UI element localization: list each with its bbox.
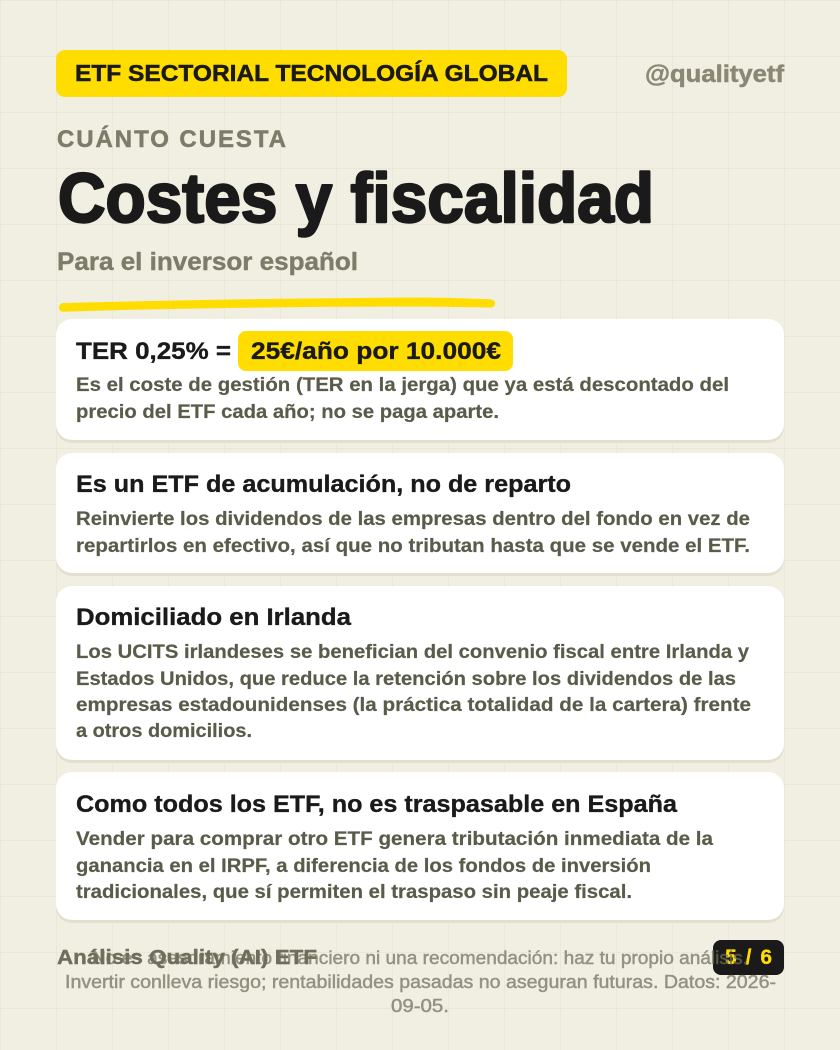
text: TER body: Es el coste de gestión (TER en la jerga) que ya está descontado del [76,374,729,396]
text: traspaso body: tradicionales, que sí permiten el traspaso sin peaje fiscal. [76,881,632,903]
panel: TER [56,319,784,443]
highlight pill [238,331,513,371]
panel: acumulación [56,453,784,576]
text: traspaso body: Vender para comprar otro ETF genera tributación inmediata de la [76,828,713,850]
text: acumulación body: Reinvierte los dividendos de las empresas dentro del fondo en vez de [76,508,750,530]
disclaimer: 09-05. [391,996,449,1016]
handle: @qualityetf [645,61,785,88]
text: Irlanda body [76,641,751,742]
eyebrow: CUÁNTO CUESTA [57,125,286,153]
page badge [713,940,784,975]
subtitle: Para el inversor español [57,248,358,276]
text: traspaso body [76,828,713,903]
text: Irlanda body: Los UCITS irlandeses se benefician del convenio fiscal entre Irlanda y [76,641,749,663]
text: Irlanda body: a otros domicilios. [76,720,252,742]
text: acumulación body [76,508,750,557]
page badge: 5 / 6 [725,946,772,969]
heading: TER: TER 0,25% = [76,338,231,365]
disclaimer: No es asesoramiento financiero ni una recomendación: haz tu propio análisis. [92,948,748,968]
text: TER body: precio del ETF cada año; no se paga aparte. [76,401,499,423]
heading: Irlanda: Domiciliado en Irlanda [76,604,352,631]
highlight pill: 25€/año por 10.000€ [251,338,501,365]
text: traspaso body: ganancia en el IRPF, a diferencia de los fondos de inversión [76,855,651,877]
panel: Irlanda [56,586,784,763]
text: TER body [76,374,729,423]
text: Irlanda body: empresas estadounidenses (la práctica totalidad de la cartera) frente [76,694,751,716]
header badge: ETF SECTORIAL TECNOLOGÍA GLOBAL [75,59,548,86]
text: Irlanda body: Estados Unidos, que reduce la retención sobre los dividendos de las [76,668,736,690]
title: Costes y fiscalidad [58,159,654,237]
header badge [56,50,567,97]
disclaimer: Invertir conlleva riesgo; rentabilidades pasadas no aseguran futuras. Datos: 2026- [65,972,776,992]
disclaimer [65,948,776,1016]
footer brand: Análisis Quality (AI) ETF [57,947,317,969]
heading: acumulación: Es un ETF de acumulación, no de reparto [76,471,571,498]
panel: traspaso [56,772,784,923]
text: acumulación body: repartirlos en efectivo, así que no tributan hasta que se vende el ETF. [76,535,750,557]
heading: traspaso: Como todos los ETF, no es traspasable en España [76,791,678,818]
yellow underline [59,298,495,312]
